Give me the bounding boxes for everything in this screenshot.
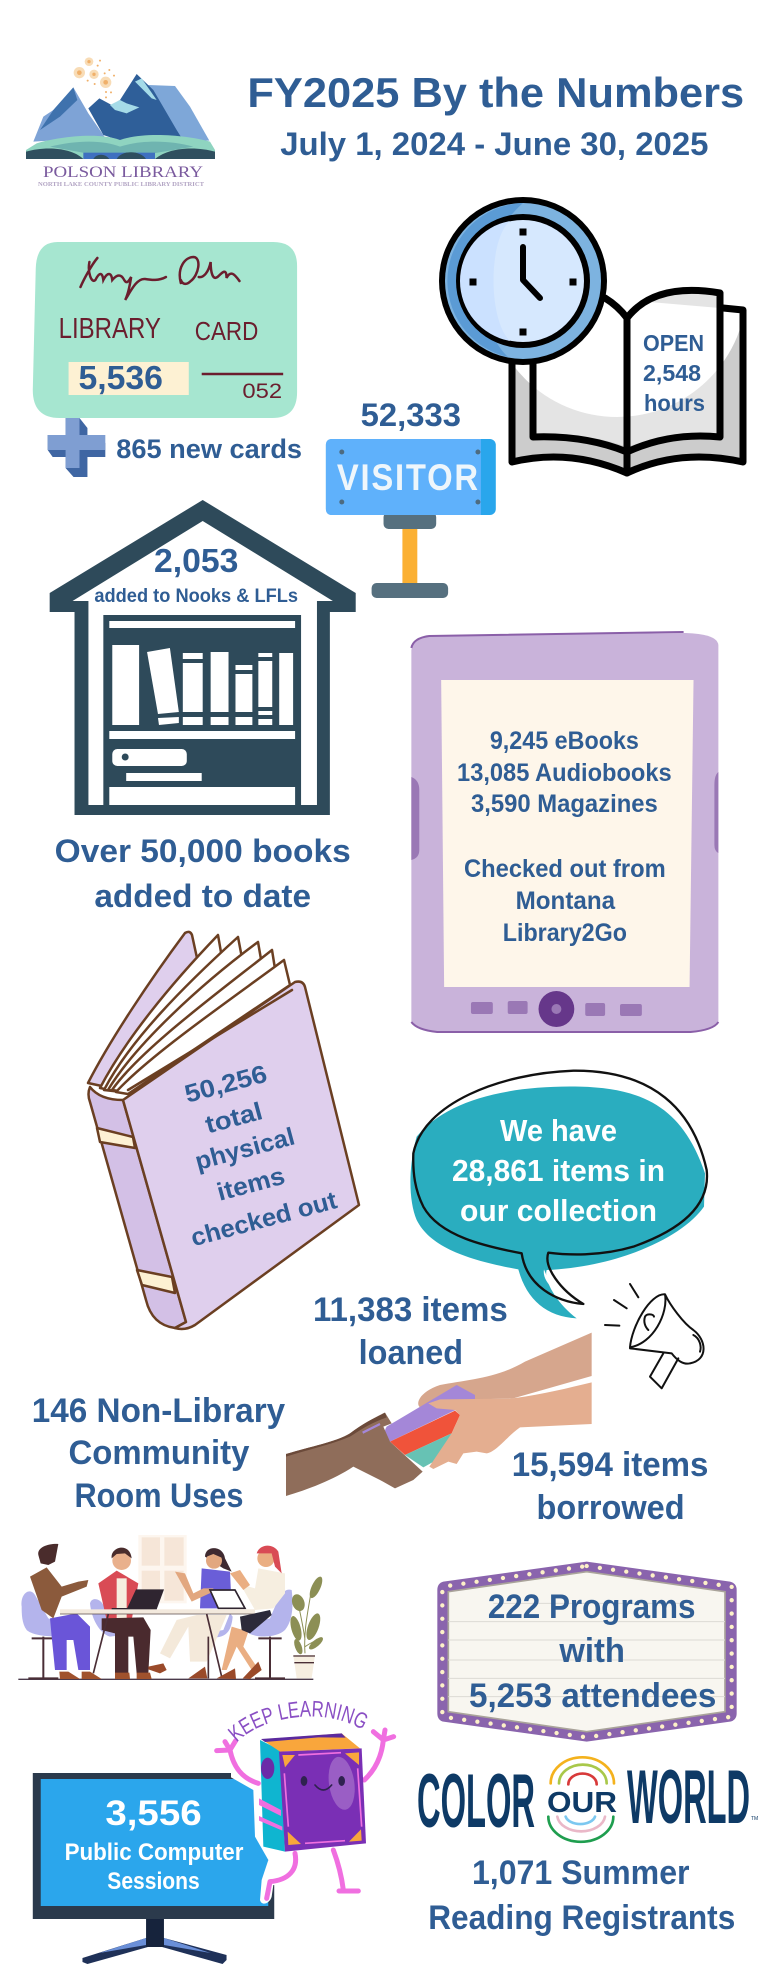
card number box	[69, 362, 189, 395]
card count: 5,536	[78, 359, 163, 396]
digital checkouts text: 3,590 Magazines	[471, 790, 658, 818]
physical checkouts text: checked out	[188, 1186, 341, 1252]
bubble text: 28,861 items in	[452, 1153, 665, 1188]
digital checkouts text: 13,085 Audiobooks	[457, 759, 672, 787]
logo: Color Our World: OUR	[547, 1787, 617, 1819]
programs text: with	[558, 1632, 625, 1670]
open hours text: hours	[644, 390, 705, 416]
icon: plus	[48, 418, 105, 477]
icon: clock and open book	[439, 197, 746, 476]
physical checkouts text: physical	[192, 1123, 298, 1176]
community room stat: Room Uses	[75, 1477, 243, 1515]
open hours text: OPEN	[643, 330, 704, 356]
summer reading stat: Reading Registrants	[428, 1899, 735, 1937]
digital checkouts text: Library2Go	[503, 919, 627, 947]
speech bubble	[410, 1071, 707, 1318]
loaned stat	[313, 1291, 508, 1372]
community room stat	[32, 1392, 285, 1515]
borrowed stat: borrowed	[537, 1489, 685, 1527]
bubble text	[452, 1113, 665, 1228]
illustration: hands passing books	[286, 1333, 592, 1496]
logo subtitle: NORTH LAKE COUNTY PUBLIC LIBRARY DISTRICT	[38, 182, 204, 188]
logo: Color Our World: TM	[751, 1816, 758, 1822]
programs text: 222 Programs	[488, 1588, 696, 1626]
digital checkouts text: Montana	[516, 887, 616, 915]
new cards stat: 865 new cards	[116, 434, 302, 464]
title: FY2025 By the Numbers	[247, 69, 744, 116]
icon: physical book	[88, 932, 359, 1329]
icon: e-reader	[411, 632, 718, 1032]
computer sessions text: 3,556	[105, 1794, 202, 1833]
subtitle: date range: July 1, 2024 - June 30, 2025	[280, 126, 708, 162]
nooks count: 2,053	[154, 542, 238, 579]
library card	[33, 242, 297, 418]
books added stat	[55, 833, 351, 914]
logo wordmark: POLSON LIBRARY	[43, 164, 204, 181]
loaned stat: loaned	[359, 1334, 463, 1372]
physical checkouts text: total	[202, 1097, 266, 1139]
borrowed stat: 15,594 items	[512, 1446, 708, 1484]
logo: Polson Library	[26, 57, 215, 188]
computer sessions text: Sessions	[107, 1868, 200, 1895]
books added stat: added to date	[94, 878, 311, 914]
icon: visitor sign	[326, 439, 496, 598]
open hours text: 2,548	[643, 360, 701, 386]
icon: little free library house	[50, 500, 356, 815]
physical checkouts text: items	[214, 1162, 288, 1207]
community room stat: 146 Non-Library	[32, 1392, 285, 1430]
visitor count: 52,333	[361, 397, 461, 433]
loaned stat: 11,383 items	[313, 1291, 508, 1329]
bubble text: We have	[500, 1113, 617, 1148]
sign text: VISITOR	[337, 457, 480, 498]
books added stat: Over 50,000 books	[55, 833, 351, 869]
digital checkouts text	[457, 727, 672, 947]
logo: Color Our World: COLOR	[417, 1759, 535, 1844]
digital checkouts text: Checked out from	[464, 855, 666, 883]
marquee sign	[437, 1562, 737, 1742]
borrowed stat	[512, 1446, 708, 1527]
card code: 052	[242, 380, 282, 403]
icon: megaphone	[605, 1284, 704, 1388]
digital checkouts text: 9,245 eBooks	[490, 727, 639, 755]
programs text: 5,253 attendees	[469, 1677, 716, 1715]
mascot: keep learning book	[214, 1700, 396, 1904]
summer reading stat	[428, 1854, 735, 1937]
mascot caption: KEEP LEARNING	[228, 1700, 368, 1742]
bubble text: our collection	[460, 1193, 657, 1228]
computer sessions text	[65, 1794, 243, 1895]
illustration: people meeting at a table	[18, 1535, 325, 1679]
programs text	[469, 1588, 716, 1715]
icon: computer monitor	[33, 1773, 274, 1964]
community room stat: Community	[69, 1434, 250, 1472]
card label: card: CARD	[195, 318, 258, 346]
card label: library: LIBRARY	[59, 313, 161, 345]
nooks label: added to Nooks & LFLs	[94, 585, 298, 607]
computer sessions text: Public Computer	[65, 1839, 243, 1866]
signature	[80, 257, 239, 300]
physical checkouts text	[182, 1060, 341, 1252]
open hours text	[643, 330, 705, 416]
summer reading stat: 1,071 Summer	[472, 1854, 690, 1892]
clock	[439, 197, 607, 365]
physical checkouts text: 50,256	[182, 1060, 270, 1109]
